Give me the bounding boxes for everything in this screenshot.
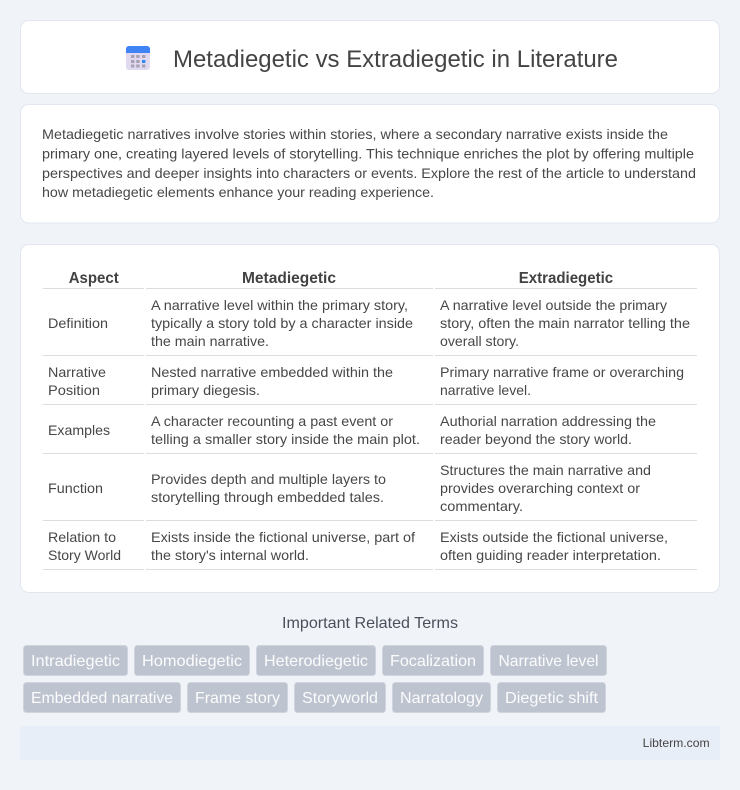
table header row: Metadiegetic	[242, 270, 336, 287]
intro text	[42, 126, 696, 200]
row: definition: typically a story told by a character inside	[151, 315, 413, 331]
related term tags: Narrative level	[498, 653, 598, 670]
related term tags: Storyworld	[302, 690, 378, 707]
row: examples: reader beyond the story world.	[440, 431, 632, 447]
related term tags: Diegetic shift	[505, 690, 599, 707]
row: function: Provides depth and multiple layers to	[151, 471, 386, 487]
row: definition	[48, 297, 690, 349]
row: function: Structures the main narrative and	[440, 462, 651, 478]
header panel	[20, 20, 720, 94]
related term tags: Homodiegetic	[142, 653, 242, 670]
related term tags: Heterodiegetic	[264, 653, 368, 670]
row: relation to story world: Exists outside the fictional universe,	[440, 529, 668, 545]
intro text: Metadiegetic narratives involve stories within stories, where a secondary narrative exists inside the	[42, 126, 668, 142]
row: narrative position: primary diegesis.	[151, 382, 260, 398]
row: relation to story world: Story World	[48, 547, 121, 563]
row: narrative position	[48, 364, 684, 398]
footer bar	[20, 726, 720, 760]
row: narrative position: Narrative	[48, 364, 106, 380]
row: relation to story world	[48, 529, 668, 563]
row: definition: A narrative level outside the primary	[440, 297, 667, 313]
row: examples	[48, 413, 656, 447]
row: relation to story world: often guiding reader interpretation.	[440, 547, 661, 563]
panel: introduction	[20, 104, 720, 223]
row: relation to story world: the story's internal world.	[151, 547, 309, 563]
row: examples: telling a smaller story inside the main plot.	[151, 431, 420, 447]
row: definition: overall story.	[440, 333, 519, 349]
row: narrative position: narrative level.	[440, 382, 531, 398]
row: narrative position: Position	[48, 382, 100, 398]
related term tags: Narratology	[400, 690, 483, 707]
intro text: perspectives and deeper insights into characters or events. Explore the rest of the article to understand	[42, 165, 696, 181]
related term tags	[24, 646, 606, 712]
table header row	[69, 270, 614, 287]
table header row: Extradiegetic	[519, 270, 614, 287]
title: Metadiegetic vs Extradiegetic in Literature	[173, 46, 618, 73]
row: examples: Authorial narration addressing the	[440, 413, 656, 429]
footer credit: Libterm.com	[643, 736, 710, 750]
row: definition: Definition	[48, 315, 108, 331]
row: examples: A character recounting a past event or	[151, 413, 393, 429]
icon: calendar	[126, 46, 150, 70]
related term tags: Embedded narrative	[31, 690, 173, 707]
row: examples: Examples	[48, 422, 110, 438]
row: narrative position: Primary narrative frame or overarching	[440, 364, 684, 380]
panel: comparison table	[20, 244, 720, 592]
intro text: primary one, creating layered levels of storytelling. This technique enriches the plot by offering multiple	[42, 146, 694, 162]
row: function: provides overarching context or	[440, 480, 640, 496]
heading: related terms: Important Related Terms	[282, 615, 458, 632]
table rules	[43, 288, 697, 570]
row: function: commentary.	[440, 498, 523, 514]
related term tags: Intradiegetic	[31, 653, 120, 670]
table header row: Aspect	[69, 270, 119, 287]
row: relation to story world: Exists inside the fictional universe, part of	[151, 529, 415, 545]
row: narrative position: Nested narrative embedded within the	[151, 364, 393, 380]
row: function: storytelling through embedded tales.	[151, 489, 384, 505]
intro text: how metadiegetic elements enhance your reading experience.	[42, 184, 434, 200]
row: function: Function	[48, 480, 103, 496]
row: relation to story world: Relation to	[48, 529, 116, 545]
row: definition: A narrative level within the primary story,	[151, 297, 408, 313]
row: definition: the main narrative.	[151, 333, 269, 349]
row: function	[48, 462, 651, 514]
related term tags: Focalization	[390, 653, 476, 670]
related term tags: Frame story	[195, 690, 280, 707]
row: definition: story, often the main narrator telling the	[440, 315, 690, 331]
